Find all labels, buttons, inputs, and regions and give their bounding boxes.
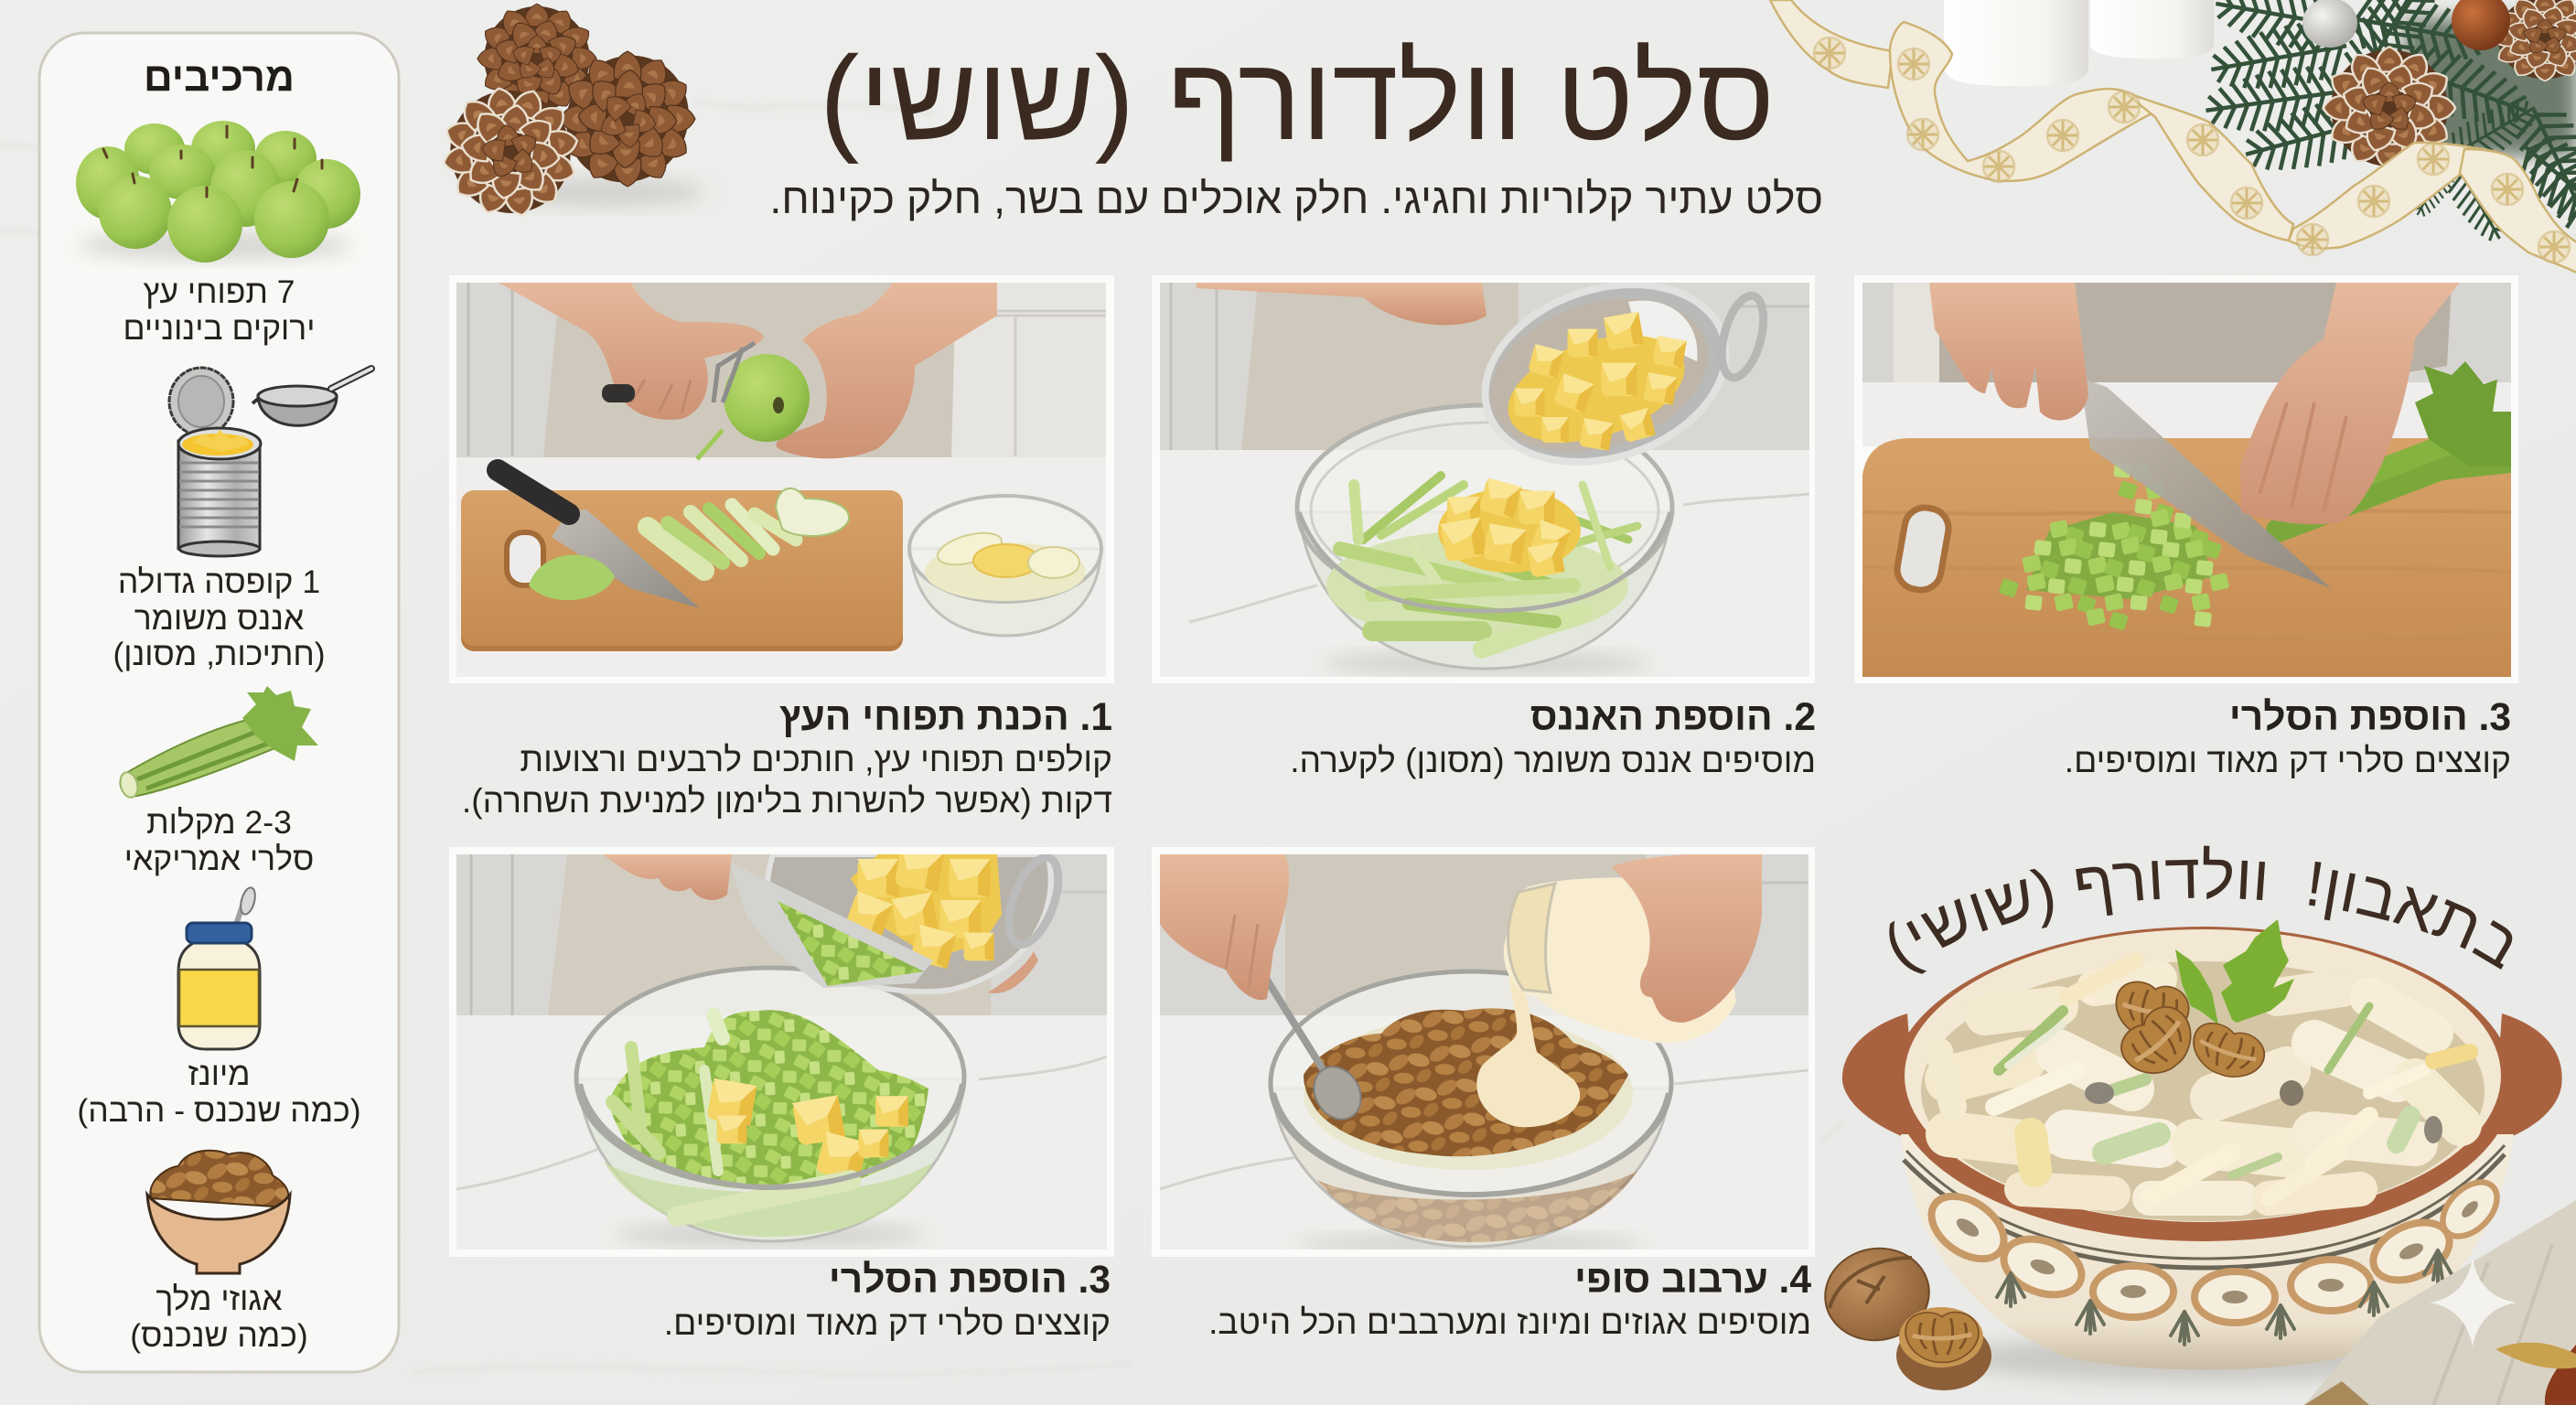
celery and pineapple in bowl — [608, 1010, 928, 1190]
bowl handles — [1842, 1014, 2562, 1143]
salad base and walnut heap — [1304, 1016, 1633, 1170]
step 2 text: מוסיפים אננס משומר (מסונן) לקערה. — [1290, 741, 1816, 779]
step 1 text — [462, 740, 1112, 820]
board handle slot — [1894, 505, 1951, 593]
icon: celery — [118, 686, 318, 799]
bowl rim — [1892, 927, 2514, 1241]
bowl body — [1901, 1134, 2514, 1370]
salad under glass — [1317, 1171, 1637, 1242]
strainer — [258, 396, 337, 425]
colander — [1462, 255, 1749, 491]
ingredient: celery: סלרי אמריקאי — [124, 840, 314, 876]
pineapple in colander — [1495, 316, 1698, 462]
ingredients panel background — [39, 33, 399, 1372]
curved caption: בתאבון! וולדורף (שושי) — [1889, 845, 2512, 974]
subtitle: סלט עתיר קלוריות וחגיגי. חלק אוכלים עם בשר, חלק כקינוח. — [769, 175, 1823, 222]
icon: pineapple can and strainer — [169, 368, 371, 556]
ingredient: celery: 2-3 מקלות — [146, 804, 292, 841]
photo 1: peeling apples — [449, 275, 1114, 683]
glass bowl — [1322, 652, 1651, 674]
celery leaf garnish — [2175, 919, 2294, 1024]
bowl front rim — [1299, 512, 1670, 611]
knife with celery — [729, 862, 933, 988]
step 3 text: קוצצים סלרי דק מאוד ומוסיפים. — [2065, 741, 2511, 779]
ingredient: pineapple: אננס משומר — [134, 600, 304, 637]
arms and hands — [499, 283, 764, 420]
glass lower — [604, 1162, 933, 1237]
photo 2: adding pineapple — [1152, 255, 1815, 683]
step 1 text: קולפים תפוחי עץ, חותכים לרבעים ורצועות — [520, 740, 1112, 778]
ingredient: walnuts — [130, 1281, 308, 1354]
ingredient: apples: ירוקים בינוניים — [123, 309, 315, 346]
icon: walnut bowl — [147, 1151, 290, 1273]
pine cones top-left — [432, 4, 720, 227]
glass bowl — [615, 1224, 926, 1246]
walnut garnish — [2111, 978, 2270, 1088]
step 3b text: קוצצים סלרי דק מאוד ומוסיפים. — [664, 1303, 1111, 1342]
title: סלט וולדורף (שושי) — [820, 31, 1775, 165]
knife — [2080, 378, 2331, 588]
step 1 heading: 1. הכנת תפוחי העץ — [779, 696, 1112, 739]
photo 3: chopping celery — [1854, 275, 2518, 683]
mayonnaise jar — [1504, 877, 1736, 1043]
ingredient: walnuts: (כמה שנכנס) — [130, 1317, 308, 1354]
napkin — [2304, 1200, 2576, 1405]
apple slices — [648, 505, 796, 571]
green apple being peeled — [724, 354, 810, 442]
pinecone in corner — [2492, 0, 2576, 81]
step 4 text: מוסיפים אגוזים ומיונז ומערבבים הכל היטב. — [1208, 1303, 1811, 1341]
chef knife — [552, 509, 700, 608]
walnut half — [1896, 1307, 1991, 1390]
step 3 heading: 3. הוספת הסלרי — [2229, 696, 2511, 739]
white cups — [1944, 0, 2214, 86]
diced celery — [1999, 462, 2229, 631]
apple chunk — [529, 555, 615, 600]
spoon — [1265, 977, 1329, 1079]
ingredient: mayonnaise: מיונז — [188, 1056, 251, 1092]
ingredients heading: מרכיבים — [144, 55, 295, 100]
ingredient: pineapple — [113, 563, 326, 672]
left hand — [1160, 854, 1289, 1000]
celery stalks — [2278, 439, 2511, 531]
ribbon — [1770, 0, 2576, 278]
whole walnut — [1818, 1240, 1937, 1348]
step 2 heading: 2. הוספת האננס — [1530, 696, 1816, 739]
step 4 heading: 4. ערבוב סופי — [1574, 1259, 1811, 1302]
final salad bowl — [1818, 919, 2576, 1405]
ingredient: walnuts: אגוזי מלך — [156, 1281, 283, 1317]
hand holding knife — [603, 854, 732, 900]
can lid — [169, 368, 233, 435]
step 3b heading: 3. הוספת הסלרי — [829, 1259, 1111, 1302]
pinecone on bough — [2324, 47, 2455, 169]
ingredient: mayonnaise — [77, 1056, 361, 1129]
apple strips — [1326, 531, 1628, 640]
ingredient: celery — [124, 804, 314, 876]
glass bowl with lemon water — [910, 549, 1101, 636]
right hand — [1611, 853, 1762, 1023]
glass bowl — [1297, 1235, 1645, 1253]
colander — [767, 854, 1051, 992]
ingredient: pineapple: (חתיכות, מסונן) — [113, 636, 326, 672]
decor: cups, ribbon, boughs top-right — [1770, 0, 2576, 278]
mayonnaise pour — [1476, 970, 1580, 1127]
ingredient: apples: 7 תפוחי עץ — [143, 273, 295, 310]
pine boughs — [2202, 0, 2576, 258]
ingredient: mayonnaise: (כמה שנכנס - הרבה) — [77, 1092, 361, 1129]
icon: mayonnaise jar — [178, 886, 260, 1049]
pineapple in bowl — [1438, 488, 1581, 573]
cutting board — [1862, 438, 2511, 677]
bowl shadow — [1958, 1335, 2470, 1382]
ingredient: apples — [123, 273, 315, 346]
copper bauble — [2452, 0, 2510, 50]
band decoration — [1904, 1145, 2507, 1345]
photo 5: mixing with walnuts and mayo — [1152, 847, 1815, 1257]
hand behind colander — [988, 951, 1038, 993]
left hand — [1929, 283, 2088, 421]
sparkle — [2430, 1258, 2517, 1346]
icon: green apples — [76, 121, 360, 263]
silver bauble — [2302, 0, 2357, 48]
can body — [178, 441, 260, 549]
right hand and fingers — [2240, 283, 2460, 524]
ingredient: pineapple: 1 קופסה גדולה — [118, 563, 320, 600]
arm and hand behind colander — [1197, 283, 1487, 325]
photo 4: adding celery — [449, 845, 1114, 1257]
cutting board — [461, 494, 903, 651]
step 1 text: דקות (אפשר להשרות בלימון למניעת השחרה). — [462, 781, 1112, 820]
salad — [1921, 960, 2485, 1221]
pineapple in colander — [851, 854, 1002, 959]
copper leaf — [2496, 1343, 2576, 1405]
